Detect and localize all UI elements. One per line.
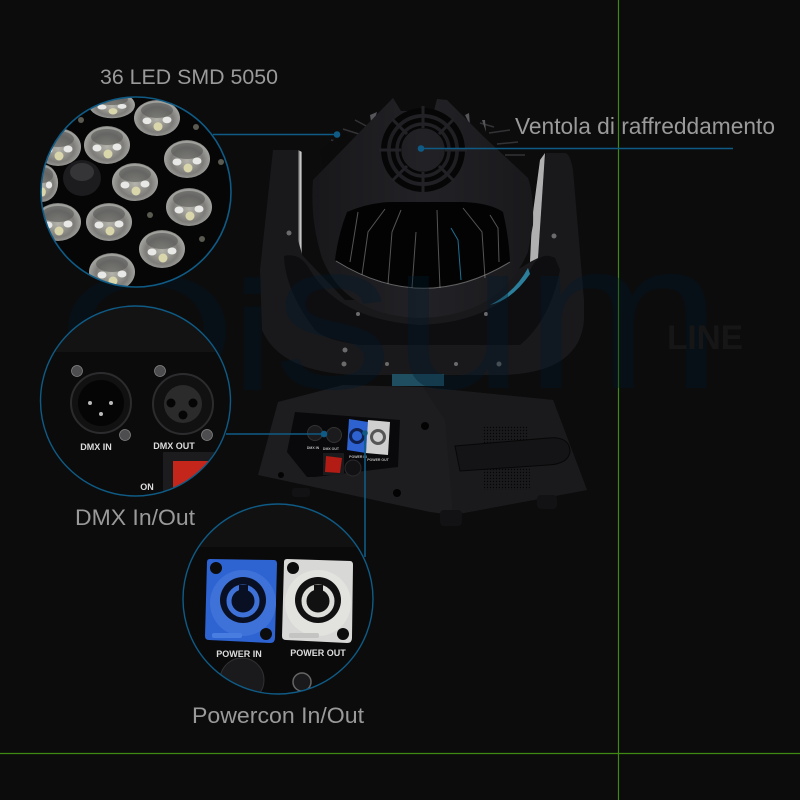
DMX OUT connector <box>153 374 213 434</box>
DMX labels <box>80 441 195 492</box>
base DMX connectors: DMX IN <box>307 446 320 450</box>
base <box>258 385 587 515</box>
heading: DMX In/Out: DMX In/Out <box>75 505 195 530</box>
bezel fins <box>336 208 510 288</box>
POWER OUT connector <box>282 559 353 643</box>
yoke arms <box>260 150 584 375</box>
product: moving head fixture <box>258 98 587 526</box>
DMX IN connector <box>71 373 131 433</box>
heading: Ventola di raffreddamento: Ventola di raffreddamento <box>515 113 775 139</box>
fuse knob <box>220 658 264 692</box>
head housing <box>312 98 533 318</box>
base powercon in <box>347 419 368 459</box>
watermark logo: O <box>57 240 237 423</box>
screws <box>72 366 212 440</box>
fan grille <box>379 106 467 194</box>
yoke inner plate <box>284 255 560 345</box>
heading: Powercon In/Out: Powercon In/Out <box>192 703 364 728</box>
head bezel opening <box>335 202 510 289</box>
zoom circle: LEDs <box>26 92 231 291</box>
base fuse holder <box>345 460 361 476</box>
base powercon out <box>366 420 390 462</box>
base feet <box>292 488 557 526</box>
DMX labels: ON <box>140 482 154 492</box>
pan neck <box>392 374 444 386</box>
DMX labels: DMX IN <box>80 442 112 452</box>
zoom circle: DMX <box>40 305 233 502</box>
DMX labels: DMX OUT <box>153 441 195 451</box>
base holes <box>278 422 429 497</box>
base DMX connectors: DMX OUT <box>323 447 340 451</box>
heading: 36 LED SMD 5050: 36 LED SMD 5050 <box>100 66 278 89</box>
power labels: POWER OUT <box>290 648 346 658</box>
yoke screws <box>286 230 556 366</box>
watermark logo <box>57 196 722 433</box>
red switch detail <box>163 452 214 491</box>
POWER IN connector <box>205 559 277 643</box>
heat-sink fins <box>320 112 525 180</box>
base right shade <box>423 387 587 515</box>
watermark LINE: LINE <box>667 319 743 357</box>
base powercon in: POWER IN <box>349 455 367 459</box>
carrying handle <box>455 438 570 471</box>
zoom circle: Powercon <box>183 504 373 702</box>
base powercon out: POWER OUT <box>367 458 390 462</box>
rear connector panel <box>287 412 400 477</box>
watermark logo: sum <box>274 196 722 433</box>
yoke lit edges <box>298 150 545 305</box>
power labels: POWER IN <box>216 649 262 659</box>
base red switch <box>323 453 344 475</box>
power labels <box>216 650 346 657</box>
watermark logo: i <box>236 252 269 420</box>
base vents <box>482 426 530 490</box>
callout lines <box>213 132 733 557</box>
jack <box>293 673 311 691</box>
base DMX connectors <box>307 426 342 451</box>
